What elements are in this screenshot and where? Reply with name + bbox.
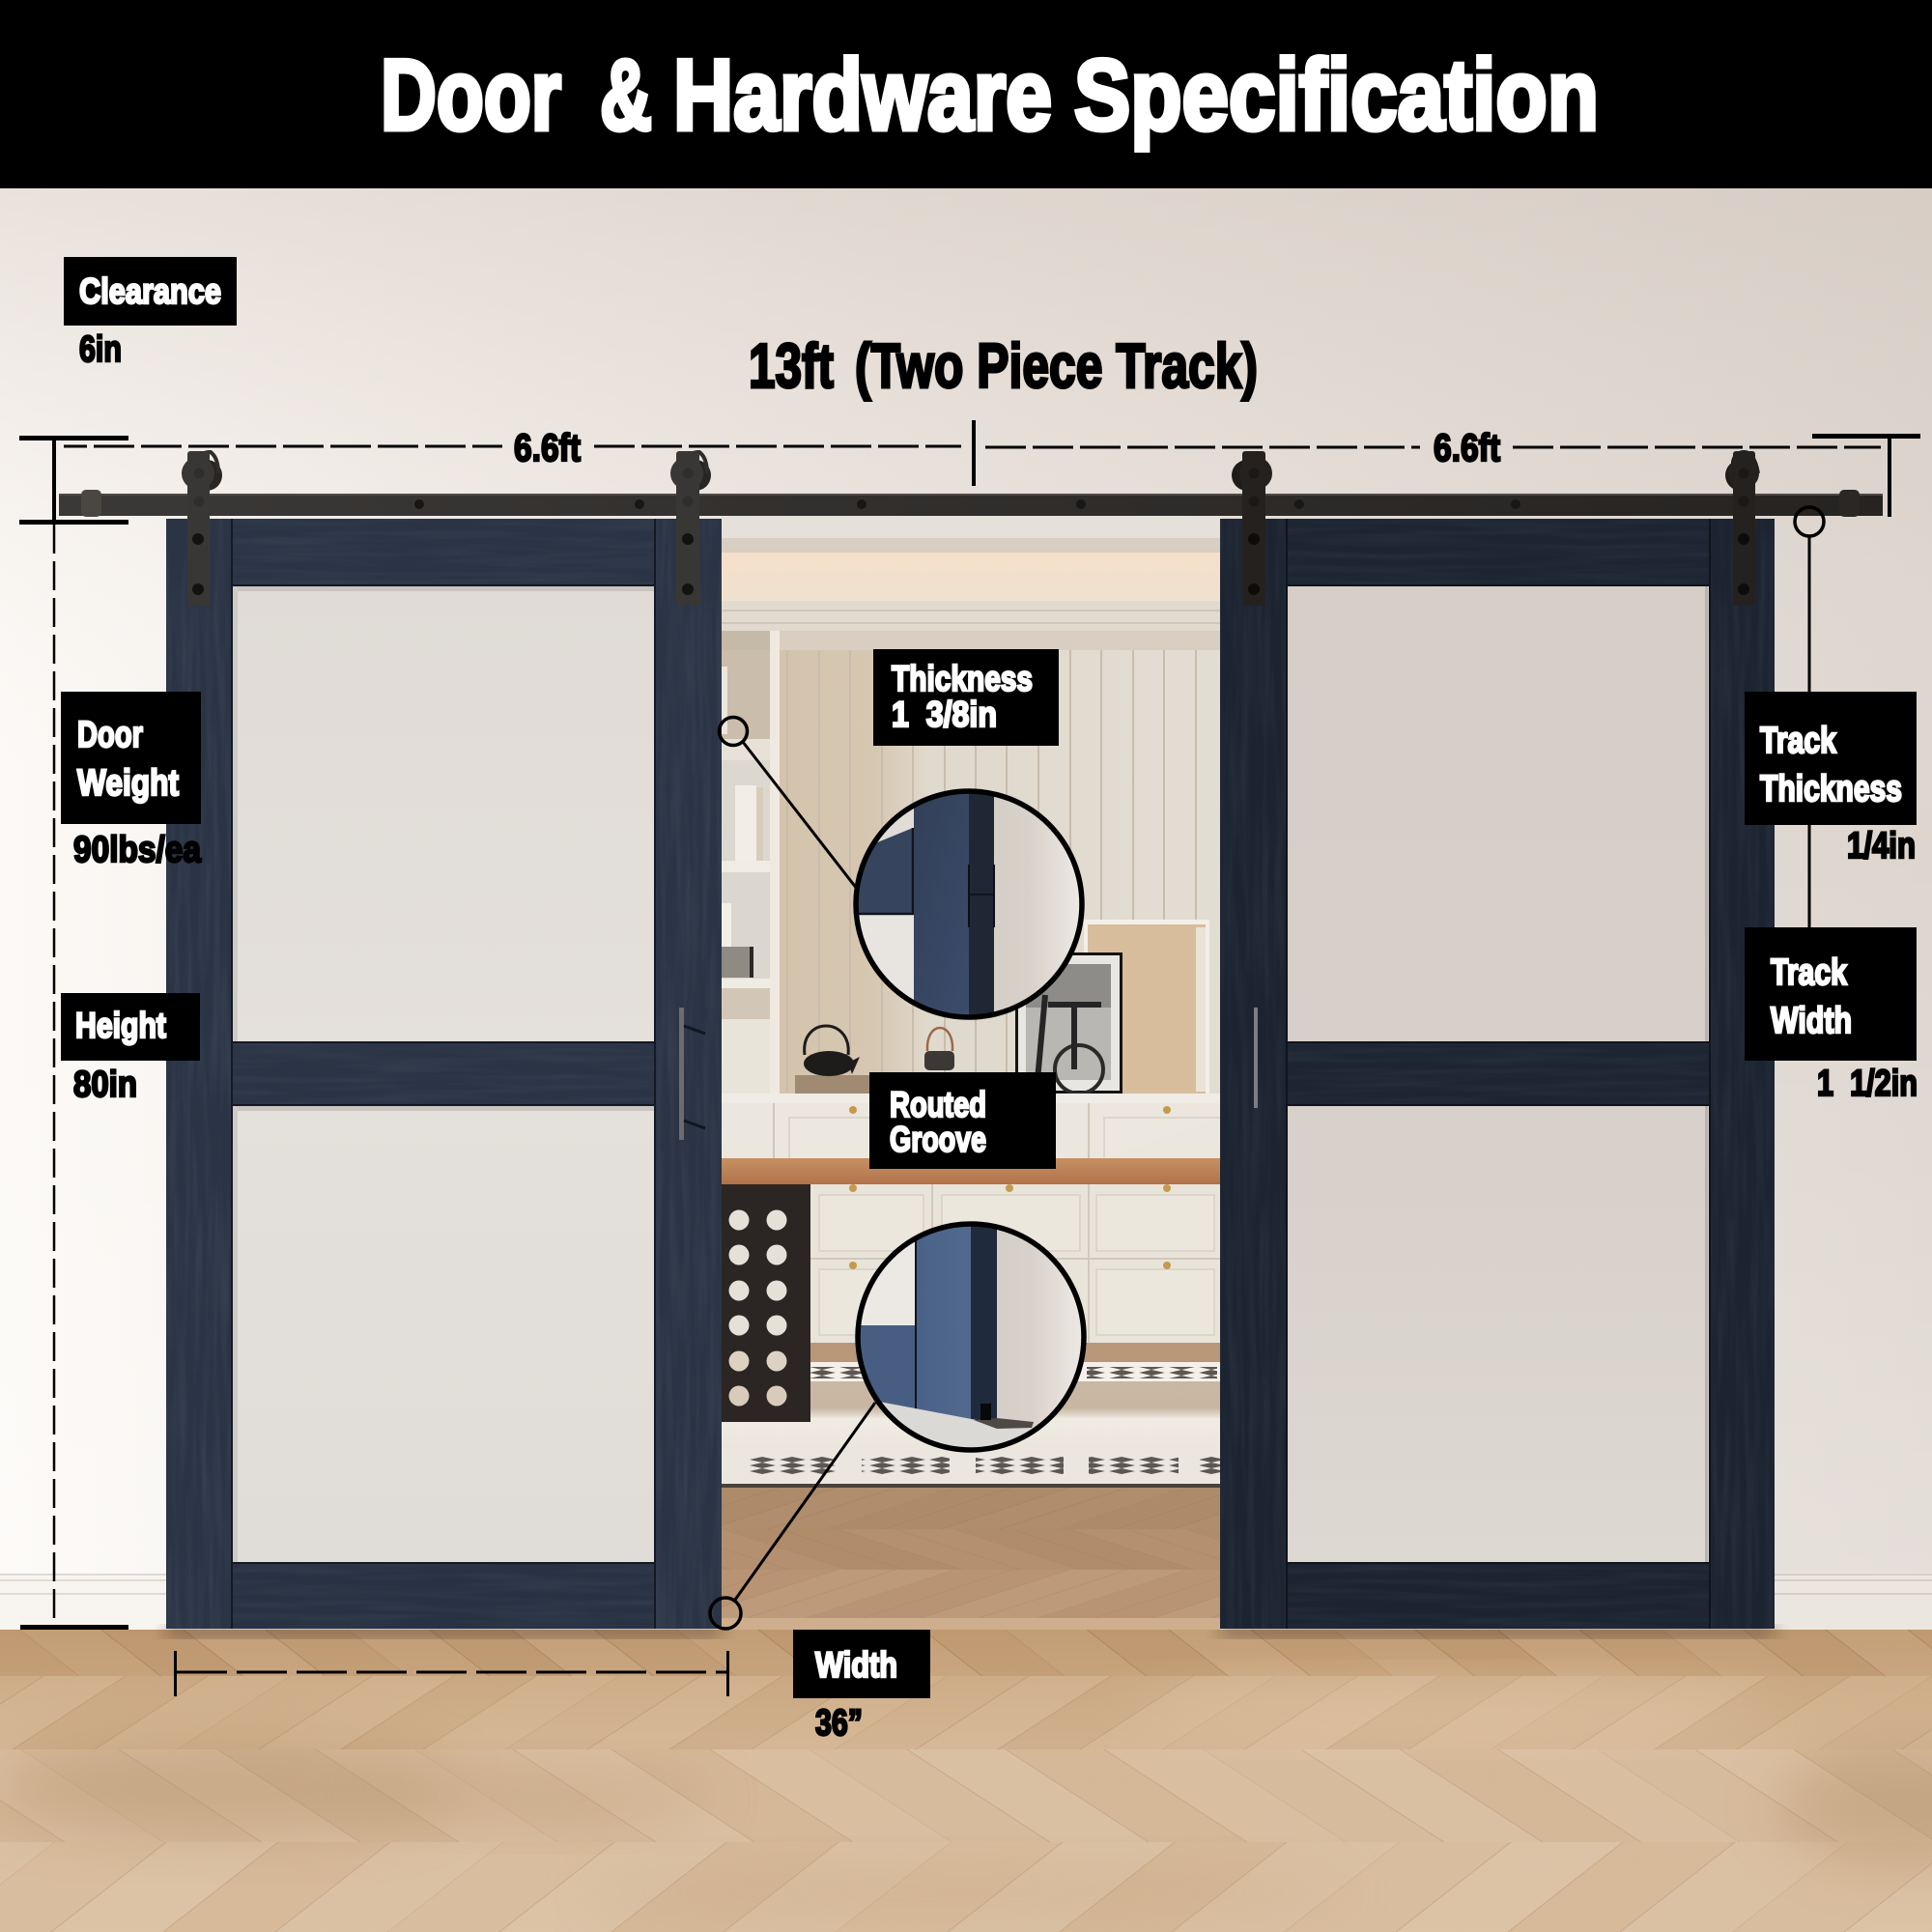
ceiling and crown molding [722,538,1220,631]
hanger straps and wheels [182,451,1759,606]
baseboard right [1775,1573,1932,1630]
beadboard back wall [779,631,1220,1094]
routed groove label [869,1072,1056,1169]
clearance bracket [19,436,128,525]
leader line: routed groove callout [710,1403,875,1629]
track width label [1745,927,1918,1104]
title: Specification [1074,40,1599,152]
right door [1220,519,1775,1629]
counter and upper cabinets [773,1094,1220,1158]
track stoppers [81,490,1860,517]
dimension: right track section: 6.6ft [1434,427,1500,469]
center tick [972,420,976,486]
track thickness label: Track [1760,721,1837,761]
routed groove label: Routed [890,1085,986,1124]
track thickness label [1745,692,1917,867]
door height dimension [20,525,128,1630]
width label [793,1630,930,1744]
thickness label: 1 3/8in [892,695,997,734]
clearance label [64,257,237,370]
track circle and leader [1795,507,1824,927]
title [381,40,1599,152]
teapots [795,1026,954,1094]
herringbone wood floor [0,1627,1932,1932]
height label [61,993,200,1105]
track width label: Width [1771,1001,1852,1041]
room floor and rug [722,1343,1220,1630]
door width dimension [174,1651,729,1696]
dimension: left track section: 6.6ft [514,427,581,469]
glass panel [232,585,655,1563]
wooden tabletop [722,1158,1220,1184]
track length heading: (Two Piece Track) [855,330,1258,401]
title: Hardware [673,40,1052,152]
routed groove label: Groove [890,1120,986,1159]
door frame [166,519,722,1629]
track thickness label: 1/4in [1847,826,1916,867]
detail magnifier: door thickness [854,790,1086,1022]
door weight label: Door [77,715,143,755]
clearance label: Clearance [79,271,221,311]
track width label: Track [1771,952,1848,993]
height label: Height [75,1006,166,1045]
hanger 2 [670,451,711,606]
title banner [0,0,1932,188]
title: Door [381,40,561,152]
title: & [600,40,652,152]
clearance label: 6in [79,329,122,370]
detail magnifier: routed groove [854,1223,1088,1453]
left door [166,519,722,1629]
wall art [1015,920,1209,1094]
hanger 4 [1725,451,1759,606]
lower cabinets [722,1184,1220,1343]
track length heading [749,330,1258,401]
door weight label: 90lbs/ea [73,830,202,870]
baseboard left [0,1573,166,1630]
height label: 80in [73,1065,137,1105]
door handle [1254,1008,1258,1108]
thickness label: Thickness [892,659,1033,698]
door frame [1220,519,1775,1629]
track length heading: 13ft [749,330,834,401]
leader line: thickness callout [719,717,857,889]
hanger 3 [1232,451,1272,606]
room interior seen through the opening [722,515,1220,1630]
door weight label [61,692,202,870]
hanger 1 [182,451,222,606]
right end bracket [1812,434,1920,517]
bookshelf [722,631,780,1094]
wall background [0,188,1932,1630]
door handle [679,1008,705,1140]
width label: 36” [815,1703,863,1744]
perforated desk panel [722,1184,810,1422]
glass panel [1287,585,1710,1563]
thickness label [873,649,1059,746]
width label: Width [815,1645,897,1685]
barn door track [59,490,1883,517]
door weight label: Weight [77,763,179,804]
